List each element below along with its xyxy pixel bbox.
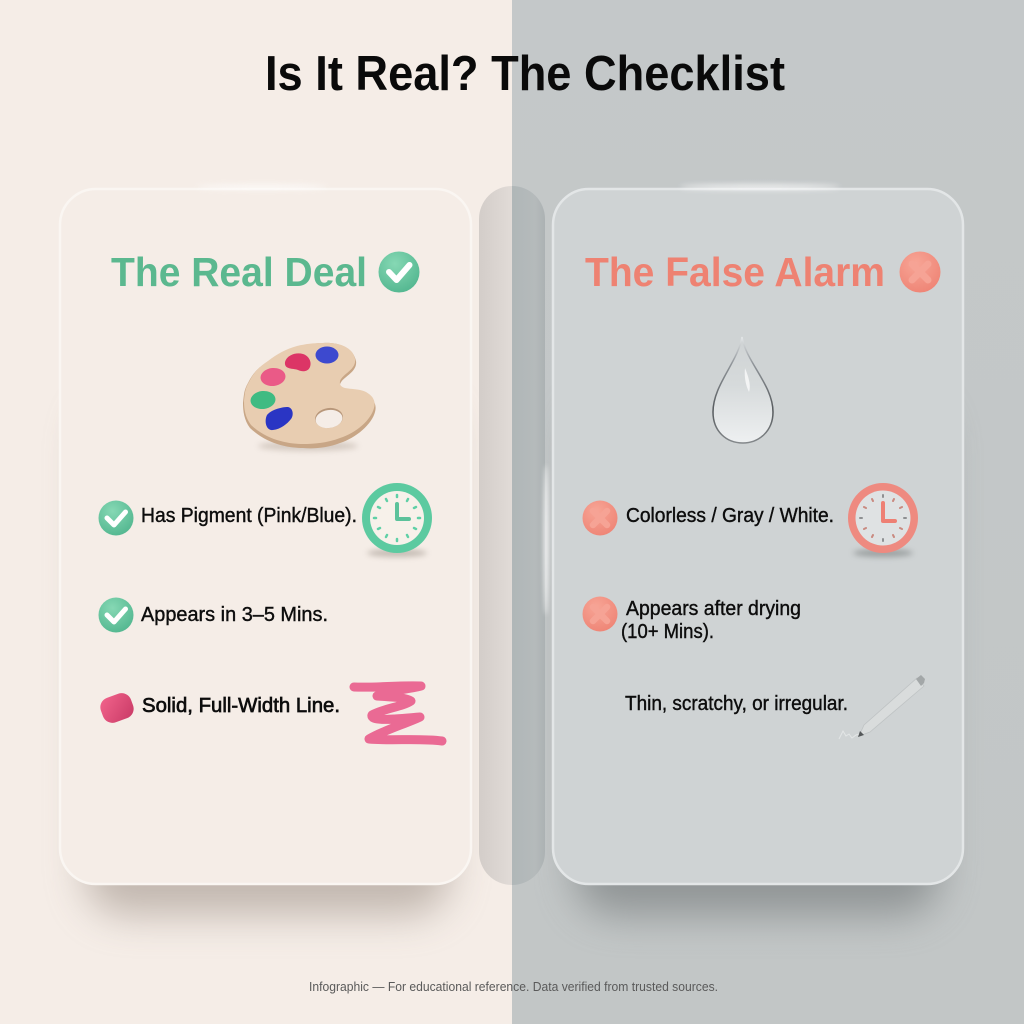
- paint blobs: [250, 346, 338, 430]
- icon: check 2: [98, 598, 134, 632]
- icon: heading check: [378, 252, 420, 292]
- background: left half: [0, 0, 512, 1024]
- text: thin scratchy: Thin, scratchy, or irregular.: [625, 693, 848, 715]
- panel: the false alarm card: [553, 189, 963, 884]
- list: false alarm: [582, 483, 925, 739]
- icon: paint palette: [243, 343, 376, 451]
- text: has pigment: Has Pigment (Pink/Blue).: [141, 505, 357, 527]
- edge highlights: [197, 184, 840, 615]
- card shadows: [66, 864, 958, 936]
- list: real deal: [98, 483, 442, 741]
- footer note: Infographic — For educational reference. Data verified from trusted sources.: [309, 980, 718, 994]
- panel: the real deal card: [60, 189, 471, 884]
- icon: red clock: [848, 483, 918, 557]
- text: appears after drying: (10+ Mins).: [621, 621, 714, 643]
- icon: green clock: [362, 483, 432, 557]
- icon: cross 2: [582, 596, 618, 632]
- text: solid line: Solid, Full-Width Line.: [142, 695, 340, 717]
- icon: pink scribble: [354, 686, 442, 741]
- title: Is It Real? The Checklist: [265, 47, 785, 101]
- icon: cross 1: [582, 500, 618, 536]
- text: colorless: Colorless / Gray / White.: [626, 505, 834, 527]
- text: appears after drying: Appears after drying: [626, 598, 801, 620]
- icon: check 1: [98, 500, 134, 536]
- icon: pink pill: [98, 690, 136, 726]
- background: right half: [512, 0, 1024, 1024]
- heading: the false alarm: The False Alarm: [585, 249, 885, 295]
- text: appears in 3-5 mins: Appears in 3–5 Mins.: [141, 604, 328, 626]
- icon: heading cross: [900, 252, 940, 292]
- icon: water drop: [713, 337, 773, 443]
- text: appears after drying: [621, 598, 801, 643]
- icon: pencil: [839, 675, 925, 739]
- heading: the real deal: The Real Deal: [111, 249, 367, 295]
- center pill divider: [479, 186, 545, 885]
